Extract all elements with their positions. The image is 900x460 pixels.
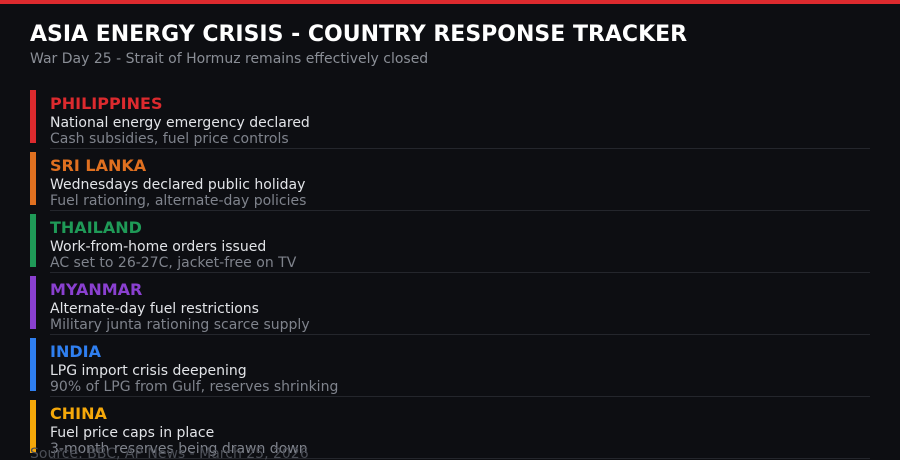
title: ASIA ENERGY CRISIS - COUNTRY RESPONSE TRACKER [30, 22, 687, 47]
row: China: Fuel price caps in place [50, 425, 214, 441]
top accent bar [0, 0, 900, 4]
row: Myanmar: Alternate-day fuel restrictions [50, 301, 259, 317]
row: Sri Lanka: SRI LANKA [50, 156, 147, 175]
row: Thailand: AC set to 26-27C, jacket-free on TV [50, 255, 297, 271]
row: Sri Lanka [30, 152, 870, 211]
row: China: 3-month reserves being drawn down [50, 441, 308, 457]
row: Myanmar [30, 276, 870, 335]
subtitle: War Day 25 - Strait of Hormuz remains effectively closed [30, 51, 428, 67]
row: Myanmar: MYANMAR [50, 280, 142, 299]
row: Philippines [30, 90, 870, 149]
row: Philippines: National energy emergency declared [50, 115, 310, 131]
row: Sri Lanka: Fuel rationing, alternate-day policies [50, 193, 306, 209]
row: Myanmar: Military junta rationing scarce supply [50, 317, 310, 333]
row: Thailand: THAILAND [50, 218, 142, 237]
row: China [30, 400, 870, 459]
row: Thailand [30, 214, 870, 273]
row: China: CHINA [50, 404, 107, 423]
row: India: INDIA [50, 342, 102, 361]
row: Sri Lanka: Wednesdays declared public holiday [50, 177, 305, 193]
row: India: 90% of LPG from Gulf, reserves shrinking [50, 379, 338, 395]
row: India [30, 338, 870, 397]
row: Philippines: Cash subsidies, fuel price controls [50, 131, 289, 147]
row: India: LPG import crisis deepening [50, 363, 247, 379]
row: Philippines: PHILIPPINES [50, 94, 162, 113]
row: Thailand: Work-from-home orders issued [50, 239, 266, 255]
